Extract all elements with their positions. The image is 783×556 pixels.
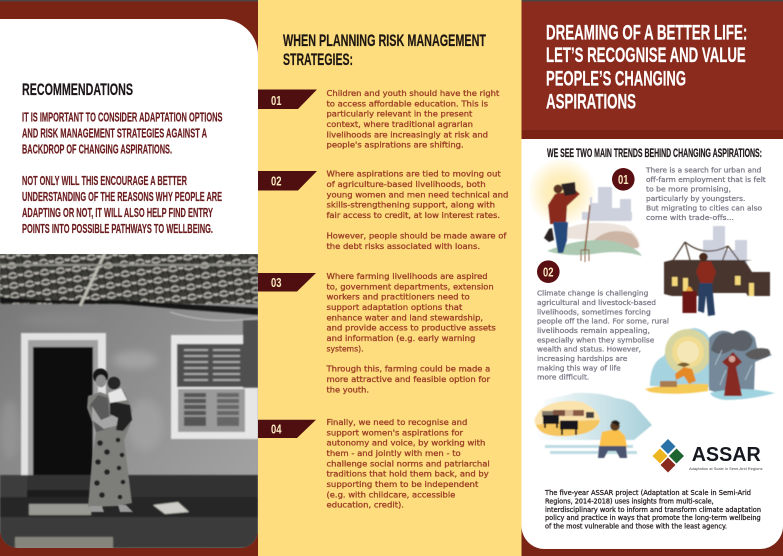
text block: ASSAR project description: policy and practice in ways that promote the long-term wellbeing [545, 514, 761, 522]
panel: title banner [522, 2, 783, 140]
figure: woman and child [87, 368, 133, 512]
text block: urban migration trend: to be more promising, [646, 184, 731, 194]
recommendation 03 text: and provide access to productive assets [326, 324, 496, 333]
text block: climate change trend: more difficult. [537, 373, 589, 382]
text block: climate change trend: livelihoods remain appealing, [537, 326, 650, 335]
heading: when planning risk management strategies: WHEN PLANNING RISK MANAGEMENT [283, 31, 486, 50]
text block: urban migration trend: particularly by youngsters. [646, 194, 745, 203]
tag: 04 [258, 420, 316, 438]
text block: ASSAR project description: The five-year ASSAR project (Adaptation at Scale in Semi-Arid [544, 489, 751, 497]
text block: climate change trend: people off the land. For some, rural [537, 317, 669, 326]
recommendation 02 text: the debt risks associated with loans. [326, 242, 480, 251]
recommendation 01 text: people's aspirations are shifting. [326, 141, 464, 150]
text block: climate change trend: increasing hardships are [537, 354, 628, 363]
heading: recommendations: RECOMMENDATIONS [22, 80, 133, 99]
title: PEOPLE’S CHANGING [546, 67, 686, 91]
text block: climate change trend: wealth and status. However, [537, 345, 641, 354]
badge: 02 [537, 260, 560, 283]
recommendation 03 text: and information (e.g. early warning [326, 334, 475, 343]
text block: recommendations body: IT IS IMPORTANT TO CONSIDER ADAPTATION OPTIONS [22, 110, 223, 124]
recommendation 02 text: fair access to credit, at low interest rates. [326, 211, 500, 220]
illustration: drought and flood [645, 328, 775, 400]
recommendation 01 text: livelihoods are increasingly at risk and [326, 130, 488, 139]
badge: 02: 02 [543, 266, 554, 280]
text block: ASSAR project description: interdisciplinary work to inform and transform climate adaptation [545, 506, 761, 514]
recommendation 02 text [326, 170, 508, 251]
recommendation 02 text: Where aspirations are tied to moving out [326, 170, 501, 179]
heading: when planning risk management strategies [283, 31, 486, 69]
illustration: man looking toward city [529, 159, 642, 262]
text block: ASSAR project description [544, 489, 761, 531]
recommendation 02 text: young women and men need technical and [326, 190, 508, 199]
panel: recommendations [0, 19, 258, 254]
text block: climate change trend: especially when they symbolise [537, 335, 655, 344]
recommendation 04 text: challenge social norms and patriarchal [326, 459, 490, 468]
recommendation 04 text: education, credit). [326, 501, 404, 510]
text block: climate change trend: making this way of life [537, 363, 621, 372]
heading: when planning risk management strategies: STRATEGIES: [283, 50, 353, 69]
tag: 02: 02 [271, 174, 282, 188]
illustration: man dreaming of cattle [535, 393, 652, 458]
tag: 03: 03 [271, 275, 282, 290]
text block: urban migration trend: There is a search for urban and [645, 166, 762, 175]
tag: 02 [258, 171, 317, 190]
text block: recommendations body [22, 110, 223, 236]
tag: 01: 01 [271, 93, 282, 108]
recommendation 03 text: workers and practitioners need to [326, 293, 470, 302]
illustration: man in informal settlement [664, 226, 770, 316]
text block: climate change trend: agricultural and livestock-based [537, 298, 656, 307]
recommendation 04 text: Finally, we need to recognise and [326, 418, 467, 427]
text block: recommendations body: AND RISK MANAGEMENT STRATEGIES AGAINST A [22, 126, 207, 140]
recommendation 04 text [326, 418, 490, 510]
recommendation 03 text: Through this, farming could be made a [325, 365, 491, 374]
recommendation 02 text: However, people should be made aware of [326, 232, 507, 241]
panel: risk management strategies [258, 0, 522, 556]
text block: urban migration trend: But migrating to cities can also [646, 204, 762, 213]
recommendation 01 text: particularly relevant in the present [326, 110, 472, 119]
recommendation 03 text: Where farming livelihoods are aspired [326, 272, 488, 281]
badge: 01 [612, 168, 635, 191]
photo: woman holding child outside house [0, 253, 258, 548]
text block: recommendations body: UNDERSTANDING OF THE REASONS WHY PEOPLE ARE [22, 189, 222, 204]
recommendation 03 text: enhance water and land stewardship, [326, 313, 483, 322]
tag: 01 [258, 90, 317, 109]
panel: two main trends [522, 139, 783, 549]
recommendation 03 text: more attractive and feasible option for [326, 375, 491, 384]
badge: 01: 01 [618, 173, 629, 187]
recommendation 03 text [325, 272, 496, 394]
recommendation 04 text: supporting them to be independent [326, 480, 478, 489]
recommendation 01 text: Children and youth should have the right [326, 89, 499, 98]
recommendation 04 text: traditions that hold them back, and by [326, 470, 489, 479]
recommendation 03 text: support adaptation options that [326, 303, 462, 312]
text block: recommendations body: NOT ONLY WILL THIS ENCOURAGE A BETTER [22, 173, 187, 188]
text block: urban migration trend: come with trade-offs... [646, 213, 734, 222]
text block: climate change trend [537, 289, 669, 382]
text block: climate change trend: Climate change is challenging [537, 289, 649, 298]
text block: urban migration trend: off-farm employment that is felt [646, 175, 766, 184]
recommendation 04 text: (e.g. with childcare, accessible [326, 490, 456, 499]
text block: recommendations body: BACKDROP OF CHANGING ASPIRATIONS. [22, 141, 172, 156]
logo: ASSAR [652, 439, 763, 472]
text block: urban migration trend [645, 166, 766, 222]
logo: ASSAR: ASSAR [692, 444, 761, 466]
recommendation 01 text: context, where traditional agrarian [326, 120, 473, 129]
recommendation 04 text: support women's aspirations for [326, 428, 464, 437]
recommendation 04 text: autonomy and voice, by working with [326, 439, 485, 448]
tag: 03 [258, 273, 316, 292]
recommendation 03 text: the youth. [326, 385, 369, 394]
text block: ASSAR project description: of the most vulnerable and those with the least agency. [545, 523, 727, 531]
text block: ASSAR project description: Regions, 2014-2018) uses insights from multi-scale, [545, 497, 714, 505]
text block: climate change trend: livelihoods, sometimes forcing [537, 307, 651, 316]
tag: 04: 04 [271, 422, 282, 436]
text block: recommendations body: ADAPTING OR NOT, IT WILL ALSO HELP FIND ENTRY [22, 205, 213, 220]
recommendation 03 text: systems). [326, 344, 364, 353]
title [546, 20, 747, 114]
recommendation 04 text: them - and jointly with men - to [326, 449, 461, 458]
title: ASPIRATIONS [546, 90, 636, 114]
text block: recommendations body: POINTS INTO POSSIBLE PATHWAYS TO WELLBEING. [22, 221, 213, 236]
recommendation 01 text: to access affordable education. This is [326, 99, 488, 108]
recommendation 02 text: of agriculture-based livelihoods, both [326, 180, 486, 189]
recommendation 02 text: skills-strengthening support, along with [326, 201, 495, 210]
recommendation 03 text: to, government departments, extension [326, 282, 494, 291]
recommendation 01 text [326, 89, 499, 150]
logo: ASSAR: Adaptation at Scale in Semi-Arid Regions [689, 467, 763, 471]
